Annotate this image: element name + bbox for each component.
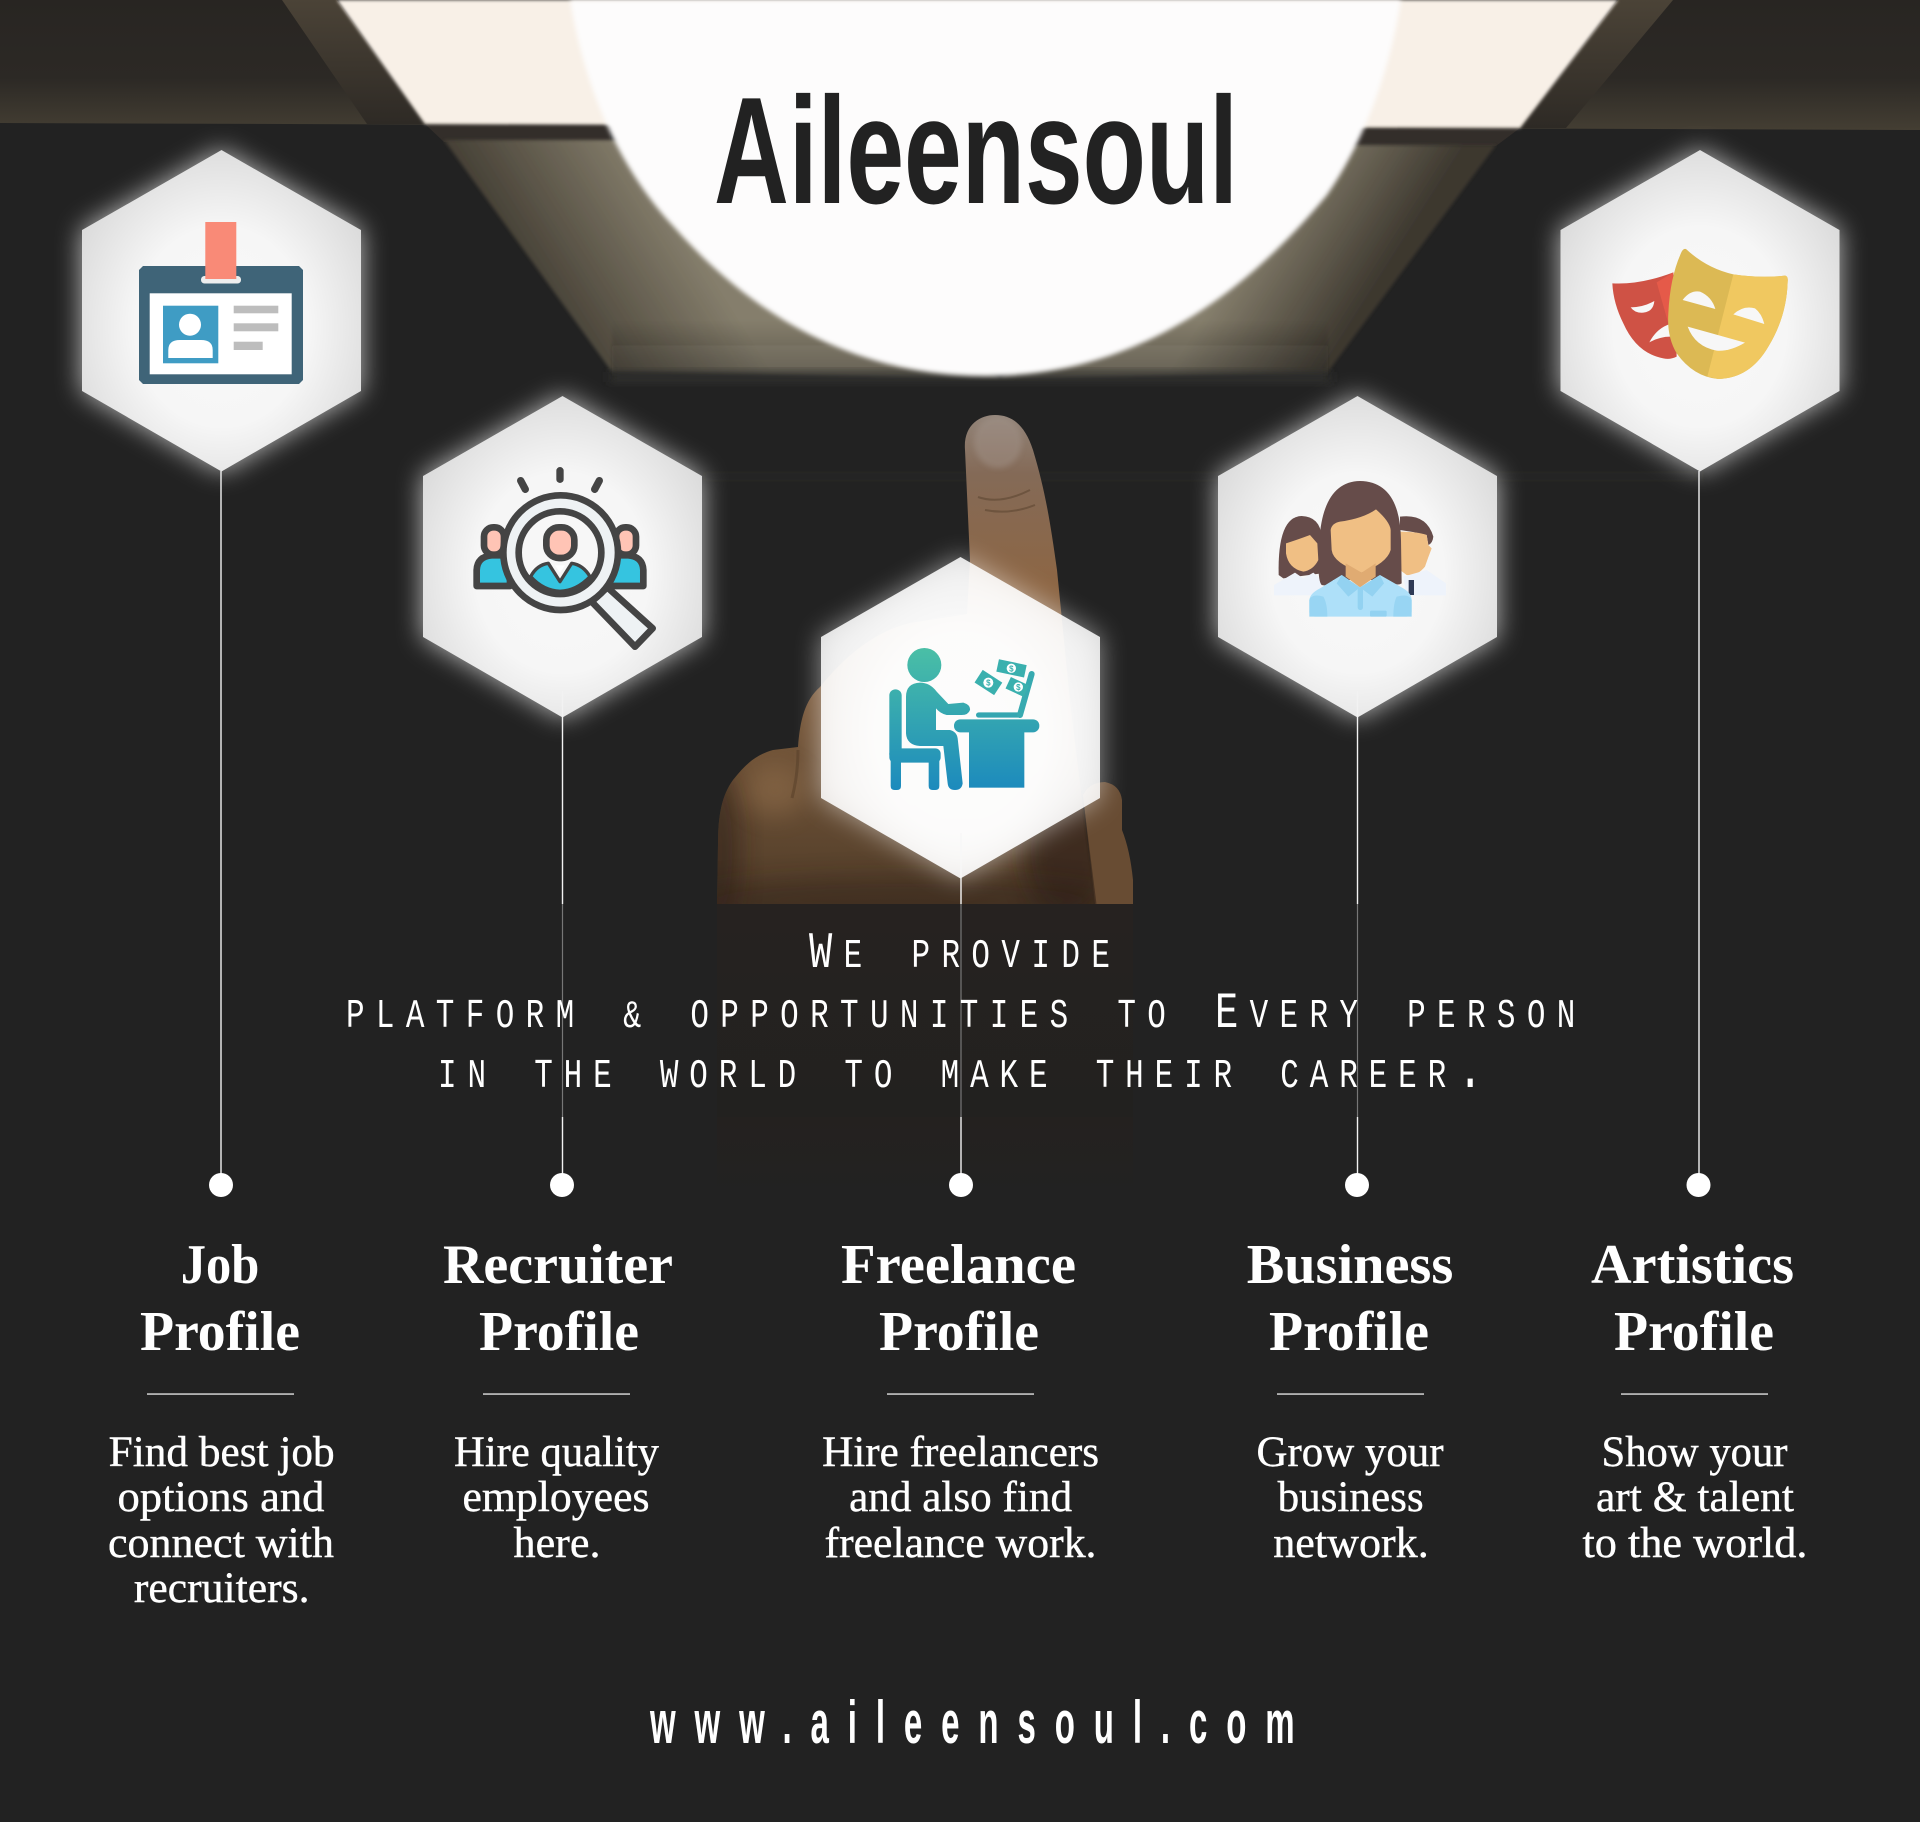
card: artistics profile: Profile — [1614, 1301, 1774, 1363]
card: freelance profile: Freelance — [841, 1234, 1076, 1296]
icon: freelancer at desk: $ — [986, 679, 991, 688]
card: artistics profile: art & talent — [1596, 1474, 1794, 1521]
icon: business team — [1274, 481, 1446, 617]
card: business profile: network. — [1273, 1520, 1429, 1567]
card: business profile: Profile — [1269, 1301, 1429, 1363]
card: job profile: recruiters. — [134, 1565, 310, 1612]
tagline: We provide — [809, 920, 1110, 985]
card: freelance profile: and also find — [849, 1474, 1072, 1521]
card: recruiter profile: Recruiter — [443, 1234, 673, 1296]
card: business profile: business — [1278, 1474, 1424, 1521]
panel: freelance profile hexagon — [821, 557, 1100, 878]
card: job profile — [108, 1234, 335, 1612]
card: artistics profile: Show your — [1602, 1429, 1788, 1476]
card: business profile: Grow your — [1256, 1429, 1444, 1476]
icon: theatre masks — [1612, 249, 1788, 379]
card: freelance profile — [822, 1234, 1099, 1567]
panel: business profile hexagon — [1218, 396, 1497, 718]
card: recruiter profile: employees — [462, 1474, 650, 1521]
card: business profile — [1247, 1234, 1453, 1567]
tagline: in the world to make their career. — [438, 1040, 1483, 1105]
connector: freelance — [949, 833, 973, 1197]
card: artistics profile: Artistics — [1591, 1234, 1794, 1296]
card: freelance profile: Hire freelancers — [822, 1429, 1099, 1476]
icon: freelancer at desk: $ — [1016, 683, 1021, 692]
connector: artistics — [1686, 471, 1710, 1197]
connector: business — [1345, 691, 1369, 1197]
tagline — [346, 920, 1575, 1105]
card: artistics profile — [1582, 1234, 1808, 1567]
icon: id badge — [139, 222, 303, 384]
icon: freelancer at desk — [889, 648, 1039, 790]
panel: job profile hexagon — [82, 150, 361, 472]
card: recruiter profile — [443, 1234, 673, 1567]
card: artistics profile: to the world. — [1582, 1520, 1808, 1567]
card: recruiter profile: Profile — [479, 1301, 639, 1363]
icon: freelancer at desk: $ — [1009, 664, 1014, 673]
panel: recruiter profile hexagon — [423, 396, 702, 718]
card: recruiter profile: here. — [514, 1520, 600, 1567]
hand — [717, 415, 1094, 904]
card: business profile: Business — [1247, 1234, 1453, 1296]
connector: job — [209, 471, 233, 1197]
card: job profile: Profile — [140, 1301, 300, 1363]
icon: magnifier over people — [477, 471, 653, 647]
card: recruiter profile: Hire quality — [454, 1429, 659, 1476]
card: job profile: options and — [118, 1474, 324, 1521]
panel: artistics profile hexagon — [1560, 150, 1840, 472]
card: job profile: Find best job — [109, 1429, 335, 1476]
background photo: ceiling lamp and pointing hand — [0, 0, 1920, 904]
connector: recruiter — [550, 691, 574, 1197]
tagline: platform & opportunities to Every person — [346, 980, 1575, 1045]
card: freelance profile: freelance work. — [824, 1520, 1096, 1567]
card: job profile: Job — [181, 1234, 259, 1296]
card: freelance profile: Profile — [879, 1301, 1039, 1363]
website url: www.aileensoul.com — [649, 1690, 1295, 1757]
card: job profile: connect with — [108, 1520, 334, 1567]
title: Aileensoul — [714, 66, 1238, 236]
